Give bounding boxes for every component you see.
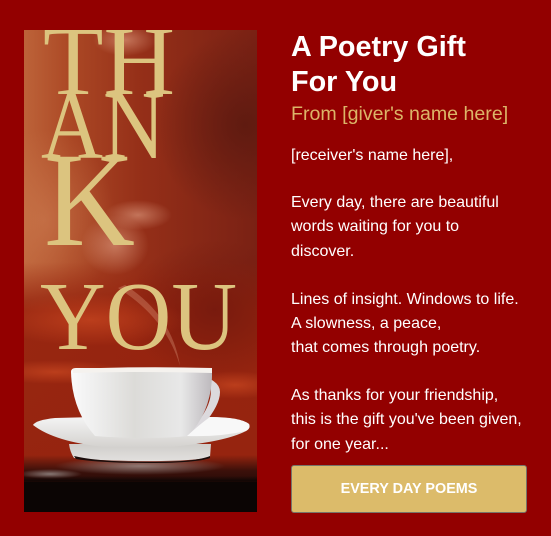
photo panel: thank you coffee cup bbox=[24, 30, 257, 512]
lettering: THANK bbox=[41, 7, 175, 275]
button: every day poems bbox=[291, 465, 527, 513]
title bbox=[291, 31, 466, 98]
paragraph 1: discover. bbox=[291, 243, 354, 260]
steam bbox=[81, 24, 180, 366]
photo background bbox=[0, 30, 335, 512]
paragraph 2: Lines of insight. Windows to life. bbox=[291, 291, 519, 308]
paragraph 2 bbox=[291, 291, 519, 356]
salutation: [receiver's name here], bbox=[291, 147, 453, 164]
button: every day poems: EVERY DAY POEMS bbox=[341, 481, 477, 497]
paragraph 3: for one year... bbox=[291, 436, 389, 453]
lettering: THANK: K bbox=[44, 126, 135, 275]
lettering: THANK: AN bbox=[41, 72, 165, 180]
table bbox=[18, 455, 257, 512]
title: A Poetry Gift bbox=[291, 31, 466, 63]
paragraph 3: this is the gift you've been given, bbox=[291, 411, 522, 428]
cup bbox=[71, 367, 250, 438]
paragraph 1: Every day, there are beautiful bbox=[291, 194, 499, 211]
saucer bbox=[33, 417, 250, 463]
paragraph 3 bbox=[291, 387, 522, 453]
paragraph 1: words waiting for you to bbox=[291, 218, 459, 235]
paragraph 2: that comes through poetry. bbox=[291, 339, 480, 356]
paragraph 2: A slowness, a peace, bbox=[291, 315, 441, 332]
paragraph 3: As thanks for your friendship, bbox=[291, 387, 498, 404]
paragraph 1 bbox=[291, 194, 499, 260]
lettering: YOU: YOU bbox=[40, 263, 237, 371]
title: For You bbox=[291, 66, 397, 98]
subtitle: from giver: From [giver's name here] bbox=[291, 103, 508, 125]
